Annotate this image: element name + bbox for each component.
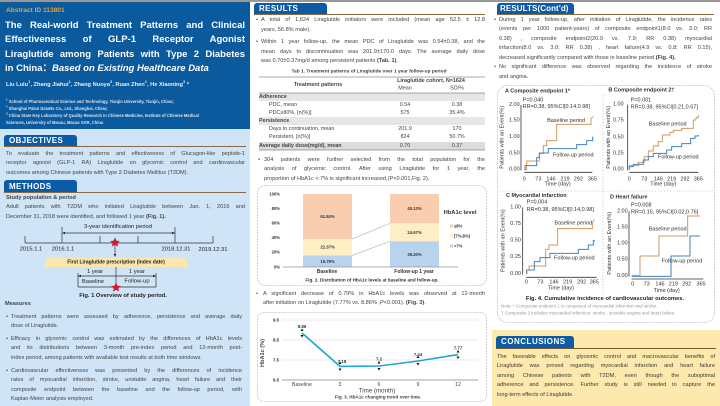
chart: A composite endpoint 1: 0.00 [509, 167, 520, 173]
chart: HbA1c trend line [258, 312, 486, 402]
chart: HbA1c distribution stacked bars [258, 186, 486, 286]
table: treatment patterns: 201.9 [398, 126, 412, 132]
text: measures bullet 1: • [6, 314, 8, 320]
chart: C myocardial infarction: 1.00 [510, 204, 521, 210]
chart: B composite endpoint 2: 219 [667, 176, 676, 182]
text: study population: December 31, 2018 were identified, and followed 1 year (Fig. 1). [6, 214, 166, 220]
panel: cumulative incidence charts [498, 86, 714, 322]
chart: B composite endpoint 2: 146 [654, 176, 663, 182]
chart: HbA1c distribution stacked bars: 0% [274, 264, 280, 270]
table: treatment patterns [259, 68, 485, 150]
chart: study period timeline: Baseline [82, 279, 104, 285]
chart: D heart failure: 0 [631, 282, 634, 288]
text: objectives: outcomes among Chinese patients with Type 2 Diabetes Mellitus (T2DM). [6, 170, 188, 176]
chart: HbA1c trend line: 7.2 [376, 356, 383, 362]
text: objectives [6, 150, 245, 176]
text: measures bullet 2: index period, among patients with available test results at both time windows. [11, 354, 202, 360]
chart: HbA1c distribution stacked bars: Follow-up 1 year [394, 269, 434, 275]
text: results bullet 2: mean days to discontinuation was 201.9±170.0 days. The average daily dose [261, 48, 485, 54]
heading: methods: METHODS [9, 182, 51, 191]
chart: A composite endpoint 1: A Composite endpoint 1* [505, 89, 571, 95]
chart: A composite endpoint 1: 365 [588, 176, 597, 182]
chart: D heart failure: 73 [644, 282, 650, 288]
chart: D heart failure: 0.00 [617, 273, 628, 279]
chart: B composite endpoint 2: Follow-up period [658, 155, 699, 161]
chart: D heart failure: 292 [682, 282, 691, 288]
text: results bullet 1: A total of 1,624 Liraglutide initiators were included (mean age 52.5 ± 12.8 [261, 17, 485, 23]
heading: results continued: RESULTS(Cont'd) [500, 4, 569, 13]
text: results bullet 3: analysis of glycemic control. After using Liraglutide for 1 year, the [264, 166, 485, 172]
affiliations [6, 97, 199, 125]
text: results bullet 4: A significant decrease of 0.79% in HbA1c levels was observed at 12-month [263, 290, 485, 296]
text: objectives: receptor agonist (GLP-1 RA) Liraglutide on glycemic control and cardiovascular [6, 160, 245, 166]
caption: fig 4: Fig. 4. Cumulative incidence of cardiovascular outcomes. [526, 296, 684, 302]
chart: B composite endpoint 2: B Composite endpoint 2† [608, 88, 674, 94]
chart: HbA1c trend line: 8.86 [298, 324, 307, 329]
table: treatment patterns: Tab 1. Treatment patterns of Liraglutide over 1 year follow-up period [291, 68, 447, 74]
chart: HbA1c trend line: 7.18 [338, 359, 347, 364]
text: measures bullet 2: Efficacy in glycemic control was estimated by the differences of HbA1c levels [11, 336, 242, 342]
affiliations: Sciences, University of Macau, Macao SAR, China [6, 120, 103, 125]
chart: A composite endpoint 1: 219 [560, 176, 570, 182]
heading: results [254, 2, 327, 14]
title [5, 20, 245, 74]
chart: B composite endpoint 2: Patients with an Event(%) [606, 106, 612, 169]
note: composite definitions: Note: * Composite endpoint 1 is composed of myocardial infarction and stroke. [501, 304, 657, 308]
chart: A composite endpoint 1: 2.00 [509, 102, 520, 108]
table: treatment patterns: Persistence [259, 118, 289, 124]
chart: D heart failure: 146 [655, 282, 665, 288]
chart: HbA1c trend line: 6 [378, 382, 381, 388]
text: results cont bullet 1: (events per 1000 patient-years) of composite endpoint1(8.0 vs. 3.0; RR [499, 26, 712, 32]
text: conclusions body: long-term effects of Liraglutide. [497, 392, 574, 398]
chart: HbA1c distribution stacked bars: 60% [272, 220, 280, 226]
chart: B composite endpoint 2: 365 [694, 176, 703, 182]
heading: conclusions: CONCLUSIONS [501, 337, 566, 346]
table: treatment patterns: PDC≥80%, [n(%)] [269, 110, 312, 116]
chart: A composite endpoint 1: 0.50 [509, 150, 520, 156]
text: measures bullet 2: and its distributions between 3-month pre-index period and 12-month post- [11, 345, 242, 351]
chart: HbA1c trend line: 6.5 [273, 378, 280, 382]
text: results bullet 1: years, 56.8% male). [261, 26, 311, 32]
heading: objectives: OBJECTIVES [9, 136, 63, 144]
chart: D heart failure: 365 [696, 282, 706, 288]
text: measures bullet 3: Cardiovascular effectiveness was presented by the differences of incidence [11, 368, 242, 374]
chart: B composite endpoint 2: 0 [628, 176, 631, 182]
chart: C myocardial infarction: 365 [590, 280, 599, 286]
text: results bullet 2: was 0.70±0.37mg/d among persistent patients (Tab. 1). [261, 58, 398, 64]
text: results bullet 4 [256, 290, 485, 306]
heading: results continued [497, 3, 574, 14]
chart: B composite endpoint 2: Baseline period [649, 122, 687, 128]
text: measures bullet 3: Kaplan-Meier analysis employed. [11, 396, 93, 402]
chart: HbA1c trend line: HbA1c (%) [260, 339, 266, 367]
chart: C myocardial infarction: Patients with an Event(%) [500, 209, 506, 272]
chart: HbA1c distribution stacked bars: 100% [269, 192, 280, 196]
chart: C myocardial infarction: 146 [549, 280, 559, 286]
note: composite definitions: † Composite 2 includes myocardial infarction, stroke , unstable angina and heart failure. [501, 310, 676, 316]
title: Effectiveness of GLP-1 Receptor Agonist [5, 34, 245, 45]
chart: HbA1c trend line: 12 [455, 382, 461, 388]
panel: title banner [0, 2, 250, 129]
chart: C myocardial infarction: 0.50 [510, 238, 521, 244]
chart: D heart failure [607, 194, 706, 294]
text: results cont bullet 1 [494, 16, 712, 60]
text: results cont bullet 1: infarction(8.0 vs. 3.0; RR 0.38) , heart failure(4.9 vs. 0.8; RR 0.15), [499, 45, 712, 51]
abstract id: Abstract ID 113801 [6, 6, 65, 14]
chart: B composite endpoint 2 [606, 88, 703, 187]
text: results cont bullet 1: During 1 year follow-up, after initiation of Liraglutide, the incidence rates [499, 16, 712, 22]
chart: A composite endpoint 1: 0 [523, 176, 526, 182]
chart: HbA1c trend line: Time (month) [359, 388, 395, 394]
affiliations: 3 China State Key Laboratory of Quality Research in Chinese Medicine, Institute of Chinese Medical [6, 111, 199, 118]
chart: C myocardial infarction: P=0.004 [527, 200, 547, 206]
chart: HbA1c distribution stacked bars: 22.37% [320, 244, 335, 250]
text: measures bullet 1: dose of Liraglutide. [11, 323, 58, 329]
chart: HbA1c trend line: 9 [417, 382, 420, 388]
chart: D heart failure: 1.00 [617, 241, 628, 247]
chart: A composite endpoint 1: Follow-up period [553, 152, 594, 158]
table: treatment patterns: 170 [452, 126, 462, 132]
text: results bullet 2 [256, 39, 485, 64]
text: results bullet 3 [258, 156, 485, 182]
chart: A composite endpoint 1: 292 [574, 176, 583, 182]
text: measures bullet 1: Treatment patterns were assessed by adherence, persistence and average daily [11, 314, 242, 320]
title: Liraglutide among Patients with Type 2 Diabetes [5, 49, 245, 60]
table: treatment patterns: 0.54 [400, 102, 410, 108]
text: results cont bullet 2: No significant difference was observed regarding the incidence of stroke [499, 64, 712, 70]
text: results bullet 3: • [258, 156, 260, 162]
text: results bullet 2: • [256, 39, 258, 45]
chart: HbA1c distribution stacked bars: 35.20% [407, 252, 422, 257]
table: treatment patterns: 35.4% [449, 110, 465, 116]
chart: study period timeline: 2018.12.31 [161, 246, 191, 252]
chart: HbA1c trend line: 7.77 [454, 346, 463, 350]
table: treatment patterns: 50.7% [449, 134, 465, 140]
chart: B composite endpoint 2: 0.25 [613, 150, 624, 156]
chart: HbA1c trend line: Baseline [292, 382, 312, 388]
text: results cont bullet 1: 0.38) , composite endpoint2(20.9 vs. 7.9; RR 0.38) myocardial [499, 36, 712, 42]
heading: conclusions [496, 336, 574, 348]
chart: HbA1c distribution stacked bars: <7% [454, 244, 463, 248]
chart: HbA1c trend line: 3 [339, 382, 342, 388]
chart: HbA1c trend line: 9.5 [273, 318, 280, 322]
text: results bullet 3: proportion of HbA1c < 7% is significant increased,(P<0.001,Fig. 2). [264, 176, 429, 182]
chart: B composite endpoint 2: 73 [641, 176, 647, 182]
text: results cont bullet 1: • [494, 16, 496, 22]
text: measures bullet 1 [6, 314, 242, 329]
chart: C myocardial infarction [500, 193, 599, 291]
chart: B composite endpoint 2: 0.50 [613, 134, 624, 140]
text: measures bullet 3: rates of myocardial infarction, stroke, unstable angina, heart failure and their [11, 377, 242, 383]
text: study population: Adult patients with T2DM who initiated Liraglutide between Jan. 1, 2016 and [6, 204, 245, 210]
text: measures bullet 3 [6, 368, 242, 402]
chart: study period timeline: First Liraglutide prescription (Index date) [67, 260, 165, 266]
text: results bullet 1 [256, 17, 485, 32]
chart: A composite endpoint 1: 73 [535, 176, 541, 182]
chart: HbA1c distribution stacked bars: 80% [272, 206, 280, 211]
heading: objectives [4, 134, 77, 146]
chart: A composite endpoint 1: Baseline period [547, 118, 585, 124]
chart: HbA1c distribution stacked bars: [7%,8%) [454, 234, 471, 238]
panel: conclusions [492, 330, 720, 406]
chart: D heart failure: Patients with an Event(%) [607, 212, 613, 275]
chart: C myocardial infarction: 292 [577, 280, 586, 286]
chart: A composite endpoint 1: 146 [546, 176, 556, 182]
text: results bullet 1: • [256, 17, 258, 23]
chart: study period timeline: Follow-up [124, 278, 150, 284]
chart: HbA1c distribution stacked bars: Fig. 2. Distribution of HbA1c levels at baseline and follow-up. [305, 278, 439, 282]
table: treatment patterns: 824 [400, 134, 410, 140]
text: measures bullet 2 [6, 336, 242, 360]
chart: A composite endpoint 1 [499, 89, 597, 187]
chart: D heart failure: Baseline period [649, 226, 687, 232]
chart: C myocardial infarction: RR=0.38, 95%CI[0.14,0.98] [527, 207, 594, 213]
chart: study period timeline: 3-year identification period [84, 224, 152, 230]
chart: HbA1c distribution stacked bars: 61.84% [320, 214, 335, 219]
table: treatment patterns: 0.70 [400, 143, 410, 149]
chart: B composite endpoint 2: 0.00 [613, 167, 624, 173]
chart: C myocardial infarction: Time (day) [548, 285, 574, 291]
chart: C myocardial infarction: 0 [525, 280, 528, 286]
text: measures bullet 3: composite endpoint between the baseline and the follow-up period, with [11, 386, 242, 392]
text: conclusions body: among Chinese patients with T2DM, even though the suboptimal [497, 373, 715, 379]
chart: HbA1c distribution stacked bars: 20% [272, 250, 280, 254]
chart: B composite endpoint 2: Time (day) [650, 181, 676, 187]
text: conclusions body: The favorable effects on glycemic control and macrovascular benefits of [497, 354, 715, 360]
chart: B composite endpoint 2: 1.00 [613, 102, 624, 108]
chart: C myocardial infarction: 0.00 [510, 271, 521, 277]
text: results cont bullet 2: and angina. [499, 74, 528, 80]
text: results bullet 4: • [256, 290, 258, 296]
chart: C myocardial infarction: C Myocardial infarction [506, 193, 567, 199]
chart: C myocardial infarction: 73 [537, 280, 543, 286]
chart: study period timeline: 1 year [129, 269, 145, 275]
text: results bullet 2: Within 1 year follow-up, the mean PDC of Liraglutide was 0.54±0.38, and the [261, 39, 485, 45]
title: in China：Based on Existing Healthcare Data [5, 63, 209, 74]
text: conclusions body: adherence and persistence. Further study is still needed to capture the [497, 382, 715, 388]
text: results cont bullet 1: decreased significantly compared with those in baseline period (Fig. 4). [499, 54, 676, 60]
panel: left column background [0, 0, 250, 406]
table: treatment patterns: SD/% [450, 86, 464, 92]
chart: A composite endpoint 1: 1.50 [509, 118, 520, 124]
text: conclusions body [497, 354, 716, 398]
table: treatment patterns: Liraglutide cohort, N=1624 [397, 78, 465, 84]
chart: C myocardial infarction: 219 [563, 280, 572, 286]
text: study population [6, 194, 245, 220]
table: treatment patterns: 575 [400, 110, 410, 116]
heading: methods [4, 180, 77, 192]
chart: D heart failure: 0.50 [617, 257, 628, 263]
chart: C myocardial infarction: Baseline period [554, 221, 592, 227]
chart: HbA1c distribution stacked bars: 15.79% [320, 259, 335, 264]
text: measures bullet 2: • [6, 336, 8, 342]
chart: study period timeline: 1 year [87, 269, 103, 275]
chart: C myocardial infarction: 0.25 [510, 254, 521, 260]
text: results cont bullet 2: • [494, 64, 496, 70]
chart: C myocardial infarction: 0.75 [510, 221, 521, 227]
chart: D heart failure: Follow-up period [662, 259, 702, 265]
affiliations: 1 School of Pharmaceutical Science and Technology, Tianjin University, Tianjin, China; [6, 97, 174, 104]
chart: D heart failure: 2.00 [617, 208, 628, 214]
chart: HbA1c distribution stacked bars: Baseline [317, 269, 337, 275]
chart: A composite endpoint 1: 1.00 [509, 134, 520, 140]
chart: HbA1c distribution stacked bars: 40.13% [407, 206, 422, 211]
chart: study period timeline: 2019.12.31 [198, 247, 228, 253]
chart: A composite endpoint 1: P=0.040 [523, 98, 543, 104]
table: treatment patterns: PDC, mean [269, 102, 297, 108]
chart: HbA1c trend line: 8.5 [273, 338, 280, 342]
chart: A composite endpoint 1: Time (day) [545, 181, 571, 187]
chart: A composite endpoint 1: RR=0.38, 95%CI[0.14,0.98] [523, 104, 590, 110]
text: measures heading: Measures [5, 300, 31, 306]
text: measures bullet 3: • [6, 368, 8, 374]
caption: fig 1: Fig. 1 Overview of study period. [79, 293, 167, 299]
chart: D heart failure: P=0.008 [631, 203, 652, 209]
text: objectives: To evaluate the treatment patterns and effectiveness of Glucagon-like peptide-1 [6, 150, 245, 156]
text: results cont bullet 2 [494, 64, 712, 80]
table: treatment patterns: Treatment patterns [294, 82, 342, 88]
chart: D heart failure: D Heart failure [610, 194, 647, 200]
chart: study period timeline: 2015.1.1 [20, 246, 42, 252]
chart: study period timeline: 2016.1.1 [52, 246, 74, 252]
chart: study period timeline [20, 224, 228, 292]
heading: results: RESULTS [259, 4, 298, 12]
note: composite definitions [501, 304, 676, 316]
chart: D heart failure: 219 [669, 282, 678, 288]
text: results bullet 4: after initiation on Liraglutide (7.77% vs. 8.86% ,P<0.001). (Fig. 3). [263, 300, 426, 306]
chart: HbA1c distribution stacked bars: ≥8% [454, 224, 463, 228]
chart: HbA1c distribution stacked bars: 40% [272, 235, 280, 240]
affiliations: 2 Shanghai Palan DataRx Co., Ltd., Shanghai, China; [6, 104, 108, 111]
chart: D heart failure: 1.50 [617, 225, 628, 231]
chart: HbA1c trend line: Fig. 3. HbA1c changing trend over time. [335, 394, 421, 400]
chart: A composite endpoint 1: Patients with an Event(%) [499, 106, 505, 169]
table: treatment patterns: Persistent, [n(%)] [269, 134, 311, 140]
chart: B composite endpoint 2: 0.75 [613, 118, 624, 124]
top edge band [0, 0, 720, 2]
text: study population: Study population & period [6, 194, 76, 200]
chart: HbA1c trend line: 7.44 [414, 352, 423, 357]
table: treatment patterns: 0.38 [452, 102, 462, 108]
chart: HbA1c trend line: 7.5 [273, 358, 280, 362]
chart: B composite endpoint 2: P=0.001 [631, 98, 651, 104]
chart: HbA1c distribution stacked bars: 24.67% [407, 230, 422, 235]
chart: C myocardial infarction: Follow-up period [554, 255, 595, 261]
chart: HbA1c distribution stacked bars: HbA1c level [444, 210, 477, 216]
chart: B composite endpoint 2: RR=0.38, 95%CI[0.21,0.67] [631, 105, 698, 111]
text: results bullet 3: 304 patients were further selected from the total population for the [264, 156, 485, 162]
table: treatment patterns: Adherence [259, 94, 287, 100]
table: treatment patterns: Mean [398, 86, 412, 92]
text: conclusions body: Liraglutide was proved regarding myocardial infarction and heart failure [497, 363, 715, 369]
chart: D heart failure: Time (day) [654, 288, 680, 294]
chart: B composite endpoint 2: 292 [680, 176, 690, 182]
table: treatment patterns: 0.37 [452, 143, 462, 149]
authors: Liu Lulu1, Zhang Jiahui1, Zhang Nuoya2, Ruan Zhen1, He Xiaoning3 * [6, 79, 189, 88]
title: The Real-world Treatment Patterns and Clinical [5, 20, 245, 31]
chart: D heart failure: RR=0.15, 95%CI[0.02,0.76] [631, 209, 699, 215]
table: treatment patterns: Average daily dose(mg/d), mean [259, 143, 341, 149]
table: treatment patterns: Days to continuation, mean [269, 126, 334, 132]
